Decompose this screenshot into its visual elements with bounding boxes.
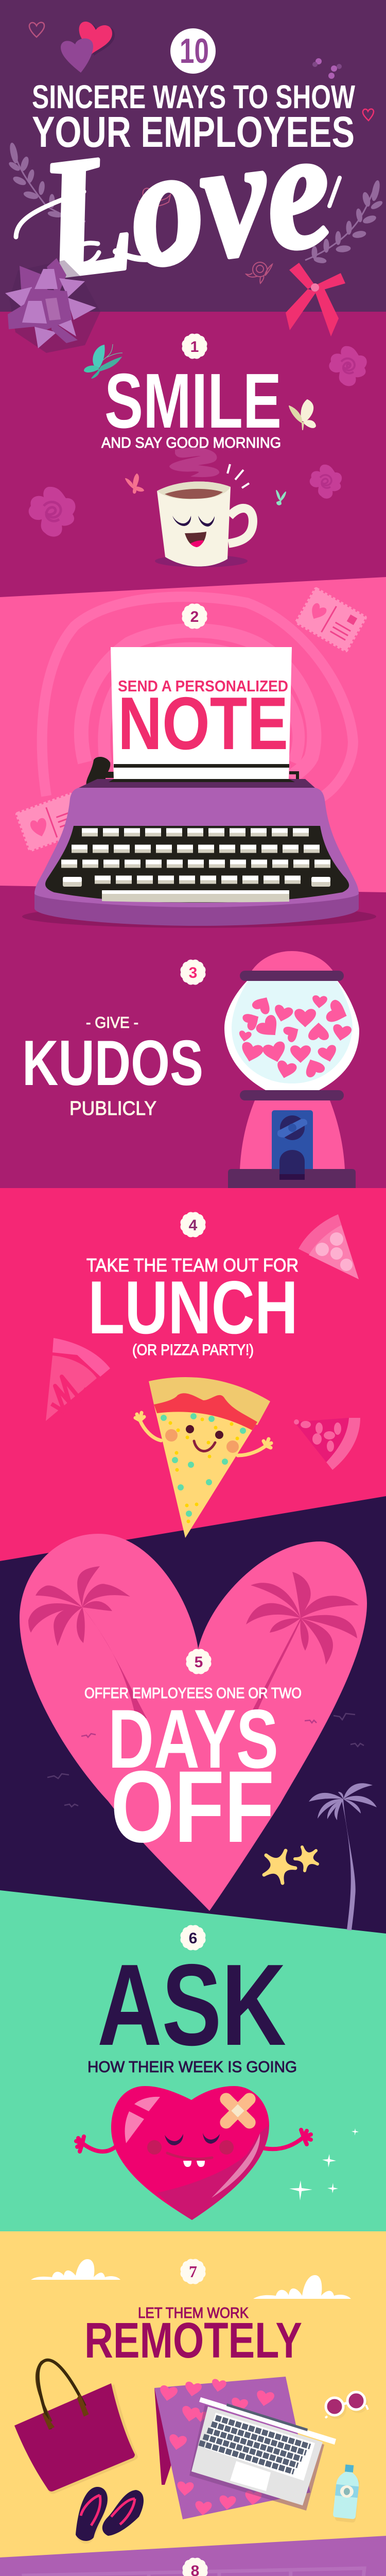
icon: flip flops <box>76 2487 144 2544</box>
gumball: dome <box>251 951 334 972</box>
panel: high fives content <box>0 2557 386 2576</box>
typewriter: body <box>34 788 359 907</box>
badge: number 10 <box>170 28 216 74</box>
panel: header background <box>0 0 386 312</box>
badge: number 2 <box>182 603 207 629</box>
icon: sparkles <box>289 2128 359 2200</box>
icon: cloud left <box>31 2259 120 2280</box>
icon: pizza slice left <box>46 1338 110 1421</box>
panel: lunch background <box>0 1188 386 1562</box>
icon: love flourishes <box>16 178 340 264</box>
pizza: face <box>165 1425 239 1453</box>
typewriter: key rows <box>61 831 336 902</box>
icon: cloud right <box>253 2275 351 2299</box>
note heading: NOTE <box>118 682 288 765</box>
panel: remotely background <box>0 2231 386 2558</box>
icon: rose left <box>29 487 76 537</box>
pizza: arms <box>135 1413 271 1455</box>
note subheading: SEND A PERSONALIZED <box>118 677 288 695</box>
typewriter: top plate <box>79 779 315 788</box>
panel: header <box>5 22 383 353</box>
notebook: heart pattern <box>159 2379 275 2516</box>
typewriter: paper sheet <box>111 647 292 780</box>
badge: number 1 <box>182 333 207 359</box>
heading: days: DAYS <box>108 1692 278 1786</box>
icon: steam <box>169 448 219 477</box>
panel: high fives background <box>0 2536 386 2576</box>
badge: number 5: 5 <box>195 1654 203 1671</box>
heading: remotely: REMOTELY <box>84 2312 302 2368</box>
icon: impact rays <box>227 464 249 488</box>
icon: rose top right <box>329 346 367 386</box>
badge: number 3: 3 <box>189 964 197 981</box>
heading: lunch: LUNCH <box>88 1265 298 1349</box>
icon: rose mid right <box>310 465 342 499</box>
panel: remotely content <box>14 2259 368 2544</box>
icon: purple palm tree <box>309 1783 377 1930</box>
panel: kudos background <box>0 886 386 1189</box>
badge: number 4: 4 <box>189 1217 198 1234</box>
badge: number 1: 1 <box>190 338 199 355</box>
text: take the team out for: TAKE THE TEAM OUT FOR <box>86 1255 299 1276</box>
badge: number 8 <box>182 2557 208 2576</box>
panel: lunch content <box>46 1212 360 1538</box>
icon: palm tree left <box>28 1566 147 1720</box>
heading: kudos: KUDOS <box>22 1028 203 1099</box>
title: love: Love <box>29 93 341 315</box>
heart: face <box>147 2133 234 2167</box>
heading: off: OFF <box>111 1750 274 1863</box>
heart: body <box>111 2086 269 2220</box>
gumball: collars <box>240 971 344 1100</box>
icon: red ribbon <box>286 263 345 336</box>
heading: smile: SMILE <box>104 357 282 444</box>
panel: smile background <box>0 312 386 598</box>
panel: ask content <box>76 1925 359 2220</box>
icon: hearts <box>61 22 115 73</box>
icon: typewriter <box>34 647 359 926</box>
heart: arms <box>76 2130 311 2151</box>
panel: note content <box>16 588 376 928</box>
text: and say good morning: AND SAY GOOD MORNING <box>101 435 281 451</box>
badge: number 5 <box>186 1649 212 1674</box>
icon: small birds <box>47 1714 364 1807</box>
icon: pizza slice top right <box>299 1214 359 1279</box>
text: offer employees one or two: OFFER EMPLOYEES ONE OR TWO <box>84 1685 302 1702</box>
panel: kudos content <box>22 951 359 1188</box>
icon: cream butterfly <box>289 400 315 430</box>
icon: tote bag <box>14 2360 138 2494</box>
icon: heart character <box>76 2086 311 2220</box>
gumball: globe <box>224 981 359 1090</box>
badge: number 7: 7 <box>189 2262 197 2281</box>
text: publicly: PUBLICLY <box>69 1098 156 1120</box>
icon: outline heart left <box>29 22 44 37</box>
badge: number 7 <box>180 2259 206 2284</box>
decoration: map grid <box>24 2568 364 2576</box>
gumball: body <box>240 1100 345 1170</box>
icon: smiling coffee mug <box>155 482 253 567</box>
icon: palm tree right <box>246 1572 359 1716</box>
typewriter: keyboard <box>45 826 349 903</box>
icon: outline heart right <box>363 109 374 121</box>
badge: number 6 <box>180 1925 206 1951</box>
text: or pizza party: (OR PIZZA PARTY!) <box>132 1342 254 1359</box>
icon: heart with banner <box>139 187 170 210</box>
gumball: chute <box>279 1150 305 1180</box>
laptop: keys <box>199 2415 310 2474</box>
badge: number 4 <box>180 1212 206 1238</box>
pizza: slice <box>154 1404 257 1538</box>
icon: pins <box>312 58 342 79</box>
icon: teal butterfly <box>84 344 122 379</box>
typewriter: knob and paper lever <box>86 757 299 787</box>
text: let them work: LET THEM WORK <box>138 2305 249 2321</box>
gumball: coin panel <box>272 1110 313 1172</box>
badge: number 3 <box>180 959 206 985</box>
icon: typewriter shadow <box>22 905 376 928</box>
badge: number 2: 2 <box>190 608 199 625</box>
panel: smile content <box>29 333 367 567</box>
icon: pink butterfly <box>126 474 144 493</box>
decoration: swirl <box>42 597 353 799</box>
heading: ask: ASK <box>97 1940 286 2070</box>
icon: sunglasses <box>325 2392 368 2419</box>
heart: highlights <box>125 2097 260 2198</box>
panel: days off content <box>20 1534 377 1930</box>
icon: yellow stars <box>264 1847 318 1883</box>
heart: shading <box>157 2125 269 2220</box>
pizza: toppings <box>161 1413 246 1517</box>
icon: notebook <box>154 2377 310 2519</box>
panel: ask background <box>0 1890 386 2232</box>
heart: bandage <box>217 2090 258 2131</box>
typewriter: base <box>34 891 359 926</box>
icon: postcard stamp bottom left <box>16 794 84 851</box>
icon: pizza slice right <box>294 1418 360 1470</box>
gumball: base <box>228 1169 356 1188</box>
icon: gift bow <box>5 258 100 353</box>
gumball: hearts <box>238 993 352 1080</box>
icon: gumball machine <box>224 951 359 1188</box>
badge: number 6: 6 <box>189 1930 197 1947</box>
icon: left laurel <box>8 142 85 226</box>
icon: postcard stamp top right <box>296 588 365 651</box>
icon: big pink heart <box>20 1534 367 1911</box>
icon: smiling pizza character <box>135 1377 271 1538</box>
icon: mint butterfly <box>276 490 286 505</box>
icon: laptop <box>189 2397 336 2511</box>
icon: rose doodle <box>246 262 272 283</box>
text: give: - GIVE - <box>86 1013 138 1031</box>
text: how their week is going: HOW THEIR WEEK IS GOING <box>87 2058 297 2076</box>
panel: note background <box>0 577 386 893</box>
icon: water bottle <box>333 2464 361 2523</box>
panel: days off background <box>0 1496 386 1934</box>
typewriter: platen bar <box>109 764 295 782</box>
badge: number 10: 10 <box>180 31 209 71</box>
icon: right laurel <box>305 180 383 264</box>
